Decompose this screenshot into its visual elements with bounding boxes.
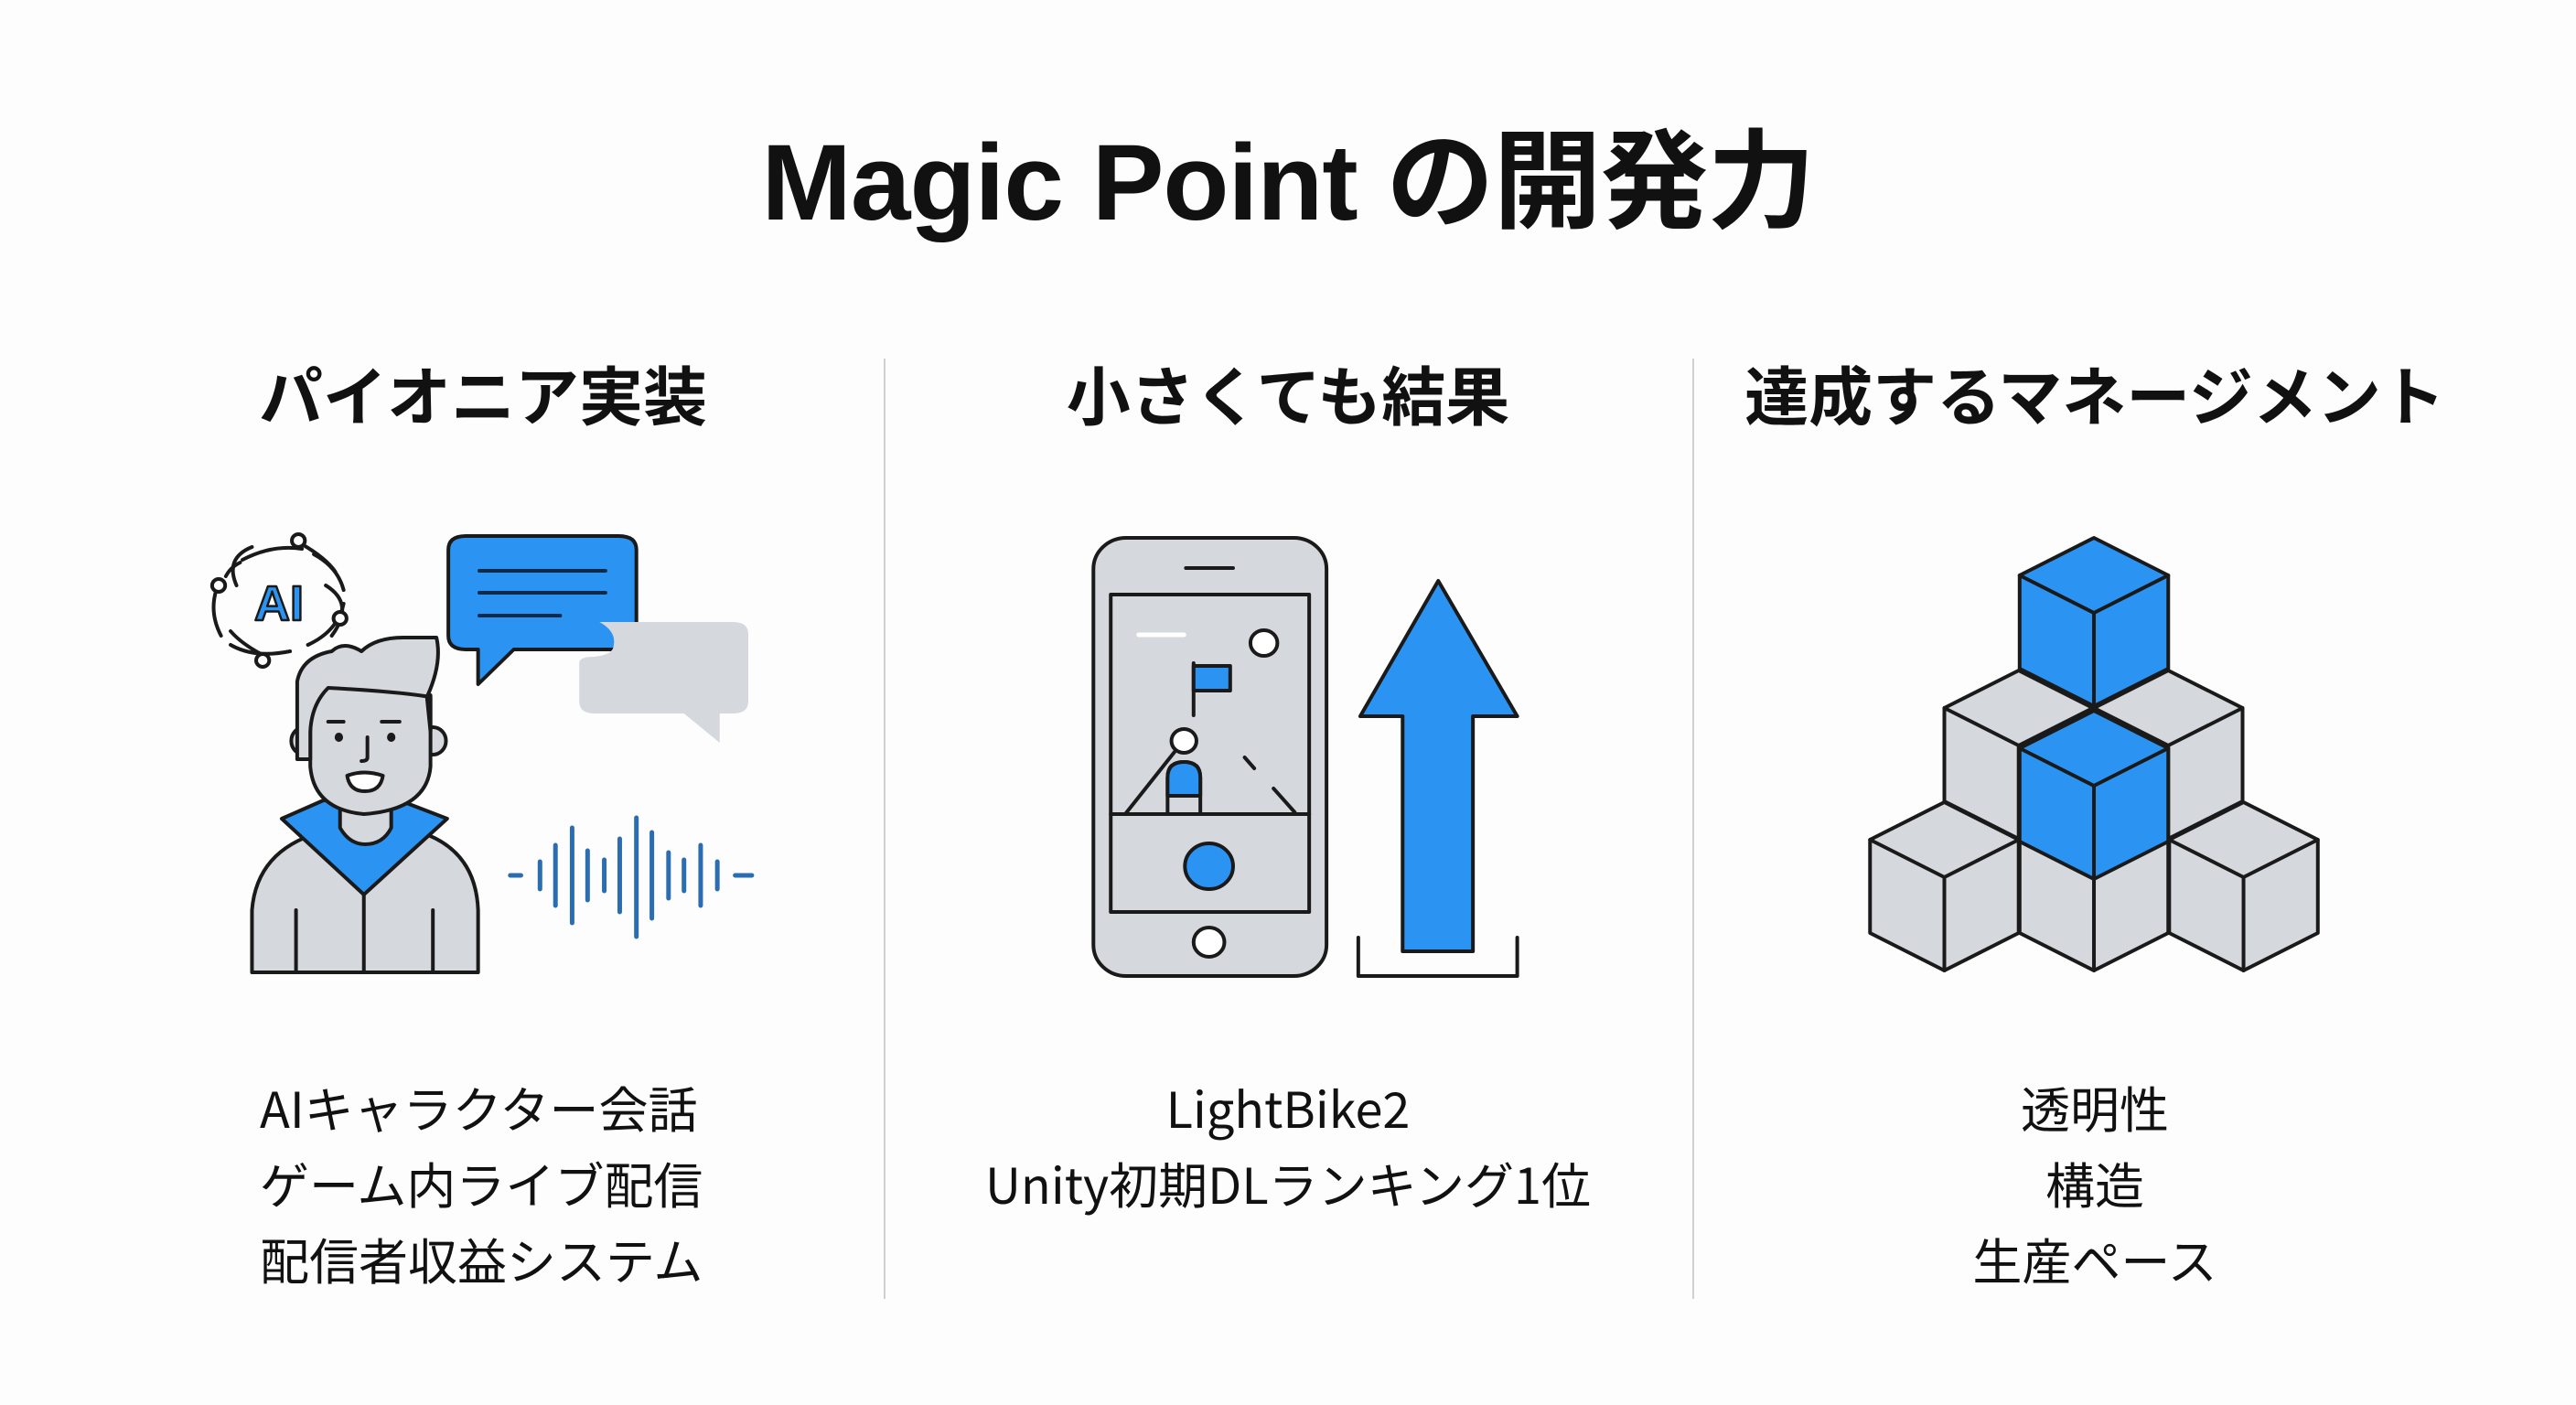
label: AI text: AI <box>254 576 304 631</box>
text block: column 3: 生産ペース <box>1972 1222 2217 1294</box>
icon: stacked cubes <box>1870 538 2318 971</box>
heading: column 1: パイオニア実装 <box>259 362 707 434</box>
text block: column 1 <box>260 1070 703 1294</box>
text block: column 2: LightBike2 <box>1166 1070 1410 1142</box>
icon: smartphone <box>1093 538 1326 976</box>
heading: column 2: 小さくても結果 <box>1067 362 1509 434</box>
text block: column 2 <box>985 1070 1591 1218</box>
title: Magic Point の開発力 <box>762 123 1814 243</box>
text block: column 1: 配信者収益システム <box>260 1222 703 1294</box>
text block: column 3: 透明性 <box>2021 1070 2169 1142</box>
icon: up arrow <box>1358 581 1518 976</box>
icon group: column 2 <box>1093 538 1518 976</box>
heading: column 3: 達成するマネージメント <box>1744 362 2445 434</box>
text block: column 2: Unity初期DLランキング1位 <box>985 1146 1591 1218</box>
icon: blue speech bubble <box>448 536 637 684</box>
icon: person <box>252 638 478 972</box>
text block: column 3: 構造 <box>2045 1146 2144 1218</box>
text block: column 1: AIキャラクター会話 <box>260 1070 697 1142</box>
icon: gray speech bubble <box>579 622 748 743</box>
text block: column 1: ゲーム内ライブ配信 <box>260 1146 703 1218</box>
icon: AI orbit <box>212 534 347 667</box>
icon group: column 1 <box>212 534 752 972</box>
text block: column 3 <box>1972 1070 2217 1294</box>
icon: sound wave <box>510 818 752 937</box>
